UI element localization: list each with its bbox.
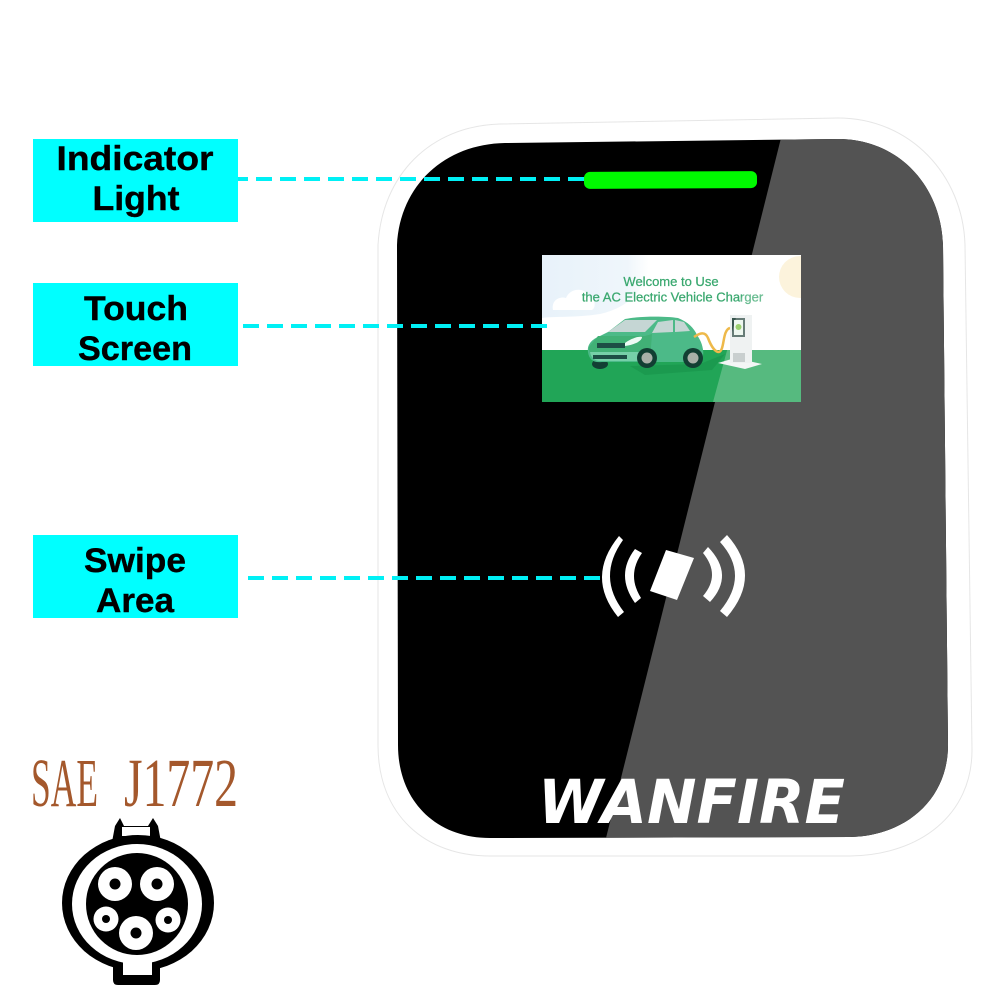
pin holes <box>102 878 172 938</box>
screen glare <box>713 255 801 402</box>
charging station <box>718 315 762 369</box>
connector bottom tab <box>113 960 160 985</box>
label text: Touch <box>84 290 188 328</box>
welcome text: Welcome to Use <box>623 274 719 289</box>
right signal arcs <box>703 535 745 617</box>
connector shell <box>62 835 214 971</box>
cloud <box>553 290 595 310</box>
car body <box>588 317 703 362</box>
charger housing <box>378 118 972 856</box>
indicator light <box>584 171 757 189</box>
black front panel <box>397 139 948 838</box>
leader line <box>248 576 600 580</box>
windows <box>608 320 657 332</box>
left signal arcs <box>602 536 642 617</box>
brand logo: WANFIRE <box>538 767 845 838</box>
sun <box>779 256 801 298</box>
sky tint <box>542 255 638 318</box>
callout: touch screen: Screen <box>78 330 192 368</box>
card <box>650 550 694 600</box>
charging cable <box>694 328 730 352</box>
label box <box>33 283 238 366</box>
label box <box>33 535 238 618</box>
far front wheel <box>592 361 608 369</box>
wheels <box>637 348 657 368</box>
touch screen: the AC Electric Vehicle Charger <box>582 290 764 304</box>
icon: SAE J1772 connector <box>62 818 214 985</box>
touch screen <box>542 255 821 402</box>
ground shadow <box>630 354 725 375</box>
green ground <box>542 350 801 402</box>
grey glass reflection <box>603 130 960 850</box>
housing outer outline <box>378 118 972 856</box>
swipe area icon <box>602 535 745 617</box>
pins <box>94 867 180 950</box>
connector standard label: J1772 <box>124 745 238 821</box>
callout: swipe area: Area <box>96 582 175 620</box>
connector top tab <box>112 818 161 842</box>
connector standard label <box>31 745 238 821</box>
connector face <box>86 853 188 955</box>
leader line <box>238 177 584 181</box>
connector standard label: SAE <box>31 745 98 821</box>
callout: indicator light: Light <box>92 180 180 218</box>
grilles and headlight <box>597 343 625 348</box>
callout: touch screen <box>33 283 547 368</box>
label text: Swipe <box>84 542 186 580</box>
label box <box>33 139 238 222</box>
callout: swipe area <box>33 535 600 620</box>
label text: Indicator <box>56 140 214 178</box>
car illustration <box>588 317 725 375</box>
leader line <box>243 324 547 328</box>
callout: indicator light <box>33 139 584 222</box>
